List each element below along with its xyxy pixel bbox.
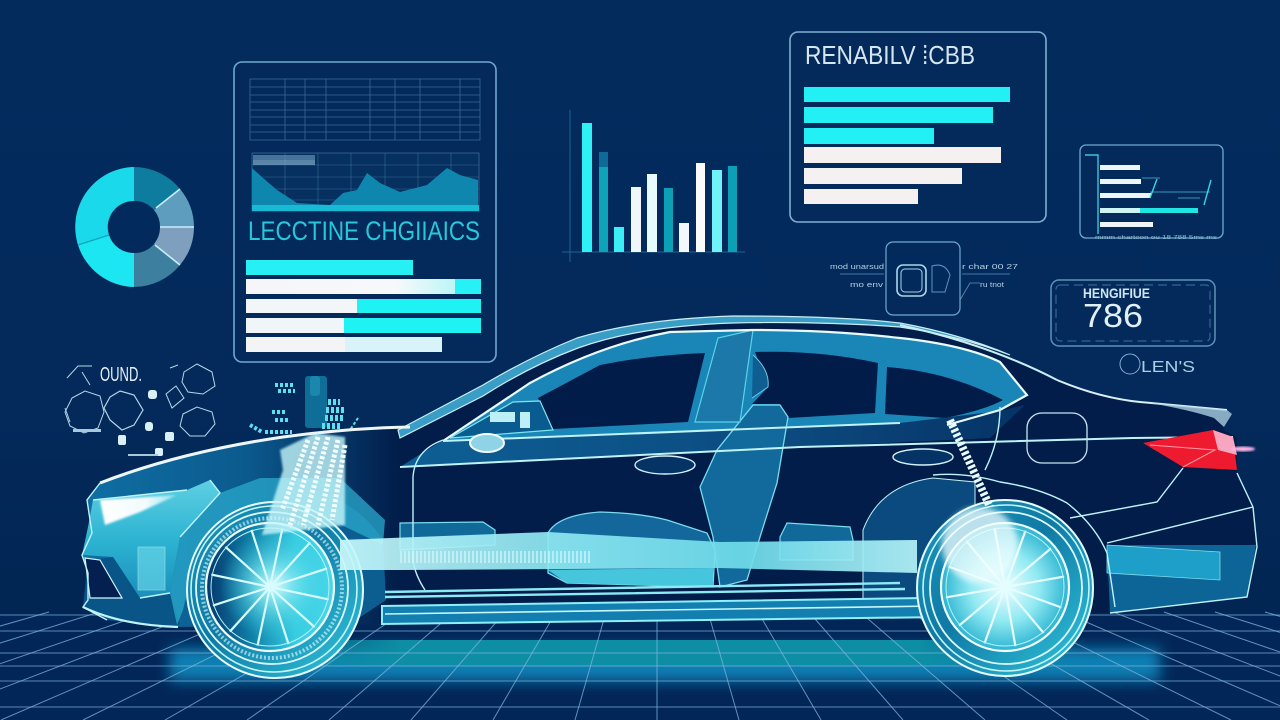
panel heading: LECCTINE CHGIIAICS bbox=[248, 216, 480, 246]
donut chart bbox=[75, 167, 194, 287]
rear door handle bbox=[893, 449, 953, 465]
molecule diagram bbox=[65, 364, 215, 456]
trunk lid highlight bbox=[1150, 403, 1232, 427]
fender band bbox=[170, 478, 385, 625]
panel: lecctine chgiiaics bbox=[234, 62, 496, 362]
rear window bbox=[752, 352, 878, 418]
fascia lower bbox=[83, 557, 180, 627]
front wheel bbox=[186, 501, 364, 679]
area chart bbox=[252, 153, 479, 211]
dashboard block bbox=[400, 522, 495, 550]
panel heading: RENABILV ⁞CBB bbox=[805, 40, 975, 70]
greenhouse frame bbox=[443, 330, 1027, 441]
panel: small line and bar chart bbox=[1080, 145, 1223, 241]
headlight bbox=[100, 495, 177, 525]
horizontal bars bbox=[804, 87, 1010, 204]
fog block bbox=[138, 547, 165, 590]
side mirror bbox=[470, 434, 504, 452]
car bbox=[82, 316, 1257, 679]
belt band bbox=[400, 405, 1025, 467]
fuel door bbox=[1027, 413, 1087, 463]
callout right labels: r char 00 27 bbox=[962, 264, 1018, 271]
component callout with icon bbox=[830, 242, 1018, 315]
front door handle bbox=[635, 456, 695, 474]
rear bumper bbox=[1107, 545, 1256, 613]
front window bbox=[538, 353, 705, 429]
metric label: HENGIFIUE bbox=[1083, 285, 1150, 301]
caption: olens: LEN'S bbox=[1141, 359, 1195, 376]
engine particle cluster bbox=[250, 376, 358, 432]
body lines bbox=[82, 330, 1257, 627]
grille bbox=[85, 558, 122, 598]
caption: olens bbox=[1120, 354, 1195, 376]
component callout with icon: mo env bbox=[850, 282, 884, 289]
windshield and roof band bbox=[398, 316, 1010, 438]
callout left labels: mod unarsud bbox=[830, 264, 884, 271]
car body silhouette bbox=[82, 319, 1257, 627]
molecule label: OUND. bbox=[100, 364, 142, 386]
seat cushion bbox=[548, 512, 715, 587]
sail panel bbox=[450, 401, 553, 438]
data table grid bbox=[250, 79, 480, 140]
icon: chip bbox=[897, 265, 950, 296]
panel: renabili cbb bbox=[790, 32, 1046, 222]
rear bumper beam bbox=[1107, 545, 1220, 580]
rear seat block bbox=[780, 523, 853, 560]
beam ribs bbox=[400, 553, 590, 561]
horizontal bars bbox=[246, 260, 481, 352]
floor beam bbox=[340, 532, 917, 573]
rear roofline bbox=[900, 325, 1057, 380]
seat back bbox=[695, 330, 788, 587]
panel: key metric bbox=[1051, 280, 1215, 346]
rocker panel bbox=[382, 598, 945, 624]
small nodes bbox=[73, 390, 174, 456]
front fascia bbox=[82, 478, 385, 627]
front suspension particle column bbox=[262, 433, 345, 535]
component callout with icon: ru tnot bbox=[980, 282, 1004, 289]
bar chart: centre bbox=[562, 110, 745, 262]
rear wheel bbox=[916, 499, 1094, 677]
axis caption: mmm chartoon ou 18 788 5ms ms bbox=[1095, 235, 1218, 241]
quarter window bbox=[885, 367, 1003, 418]
floor grid with glow bbox=[0, 612, 1280, 720]
tail light bbox=[1143, 430, 1255, 470]
lower seat glow bbox=[548, 568, 713, 587]
front wheel well bbox=[285, 488, 386, 624]
rear wheel well bbox=[863, 478, 975, 610]
metric value: 786 bbox=[1083, 297, 1143, 334]
rear suspension spring bbox=[950, 420, 990, 507]
